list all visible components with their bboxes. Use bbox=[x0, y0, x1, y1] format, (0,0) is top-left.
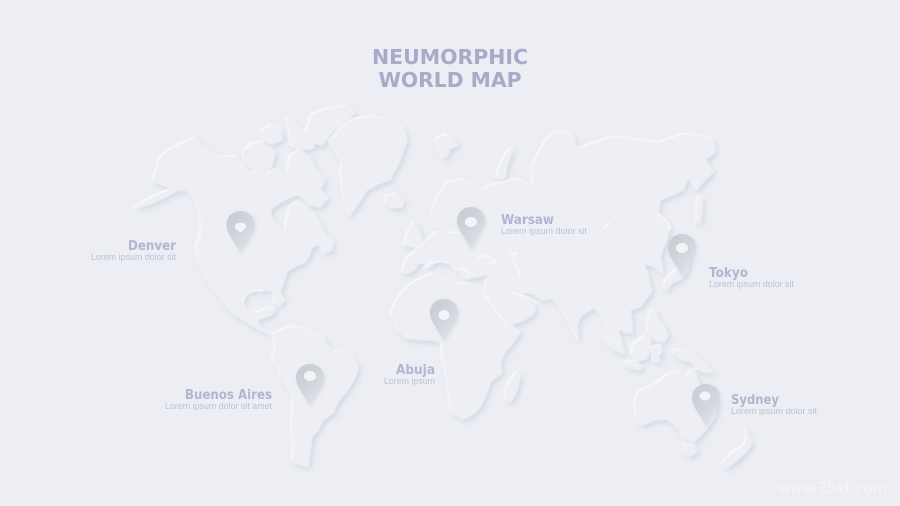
pin: Buenos Aires bbox=[296, 364, 324, 406]
island: Java bbox=[625, 362, 642, 370]
island: Borneo bbox=[632, 337, 651, 361]
label: Tokyo: Tokyo bbox=[709, 266, 748, 281]
island: Madagascar bbox=[506, 373, 520, 402]
island: Japan bbox=[664, 254, 690, 290]
continent: Australia bbox=[635, 371, 718, 442]
continent: Eurasia bbox=[403, 133, 715, 350]
continent: Africa bbox=[392, 274, 520, 419]
island: Sulawesi bbox=[652, 346, 662, 362]
label: Sydney: Sydney bbox=[731, 393, 779, 408]
label: Sydney bbox=[731, 393, 818, 416]
title: WORLD MAP bbox=[378, 68, 522, 92]
label: Abuja: Lorem ipsum bbox=[384, 376, 435, 386]
islands: Philippines bbox=[648, 311, 668, 342]
inland seas and coast highlights bbox=[243, 213, 671, 360]
label: Denver: Lorem ipsum dolor sit bbox=[91, 252, 177, 262]
island: New Guinea bbox=[673, 351, 713, 373]
label: Warsaw: Warsaw bbox=[501, 213, 554, 228]
islands: New Zealand bbox=[723, 430, 752, 468]
Arctic islands bbox=[243, 142, 275, 172]
label: Buenos Aires: Lorem ipsum dolor sit amet bbox=[165, 401, 273, 411]
label: Denver: Denver bbox=[128, 239, 177, 254]
island: Tasmania bbox=[685, 444, 697, 456]
pin: Tokyo bbox=[668, 234, 696, 276]
label: Abuja bbox=[384, 363, 435, 386]
island: Sakhalin bbox=[697, 198, 702, 223]
world map bbox=[135, 107, 752, 468]
label: Tokyo bbox=[709, 266, 795, 289]
island: Novaya Zemlya bbox=[497, 149, 513, 179]
label: Buenos Aires: Buenos Aires bbox=[185, 388, 272, 403]
label: Denver bbox=[91, 239, 177, 262]
continent: South America bbox=[273, 327, 358, 467]
title: NEUMORPHIC bbox=[372, 45, 528, 69]
label: Tokyo: Lorem ipsum dolor sit bbox=[709, 279, 795, 289]
title bbox=[372, 45, 528, 92]
label: Warsaw: Lorem ipsum dolor sit bbox=[501, 226, 588, 236]
label: Warsaw bbox=[501, 213, 588, 236]
pin: Warsaw bbox=[457, 207, 485, 249]
pin: Sydney bbox=[692, 384, 720, 426]
label: Abuja: Abuja bbox=[396, 363, 435, 378]
watermark: www.25xt.com bbox=[778, 479, 887, 497]
pin: Denver bbox=[226, 211, 254, 253]
island: Iceland bbox=[436, 135, 457, 158]
islands: Britain and Ireland bbox=[405, 223, 422, 247]
island: Sumatra bbox=[606, 337, 625, 354]
label: Buenos Aires bbox=[165, 388, 273, 411]
label: Sydney: Lorem ipsum dolor sit bbox=[731, 406, 818, 416]
continent: North America bbox=[135, 138, 328, 335]
pin: Abuja bbox=[430, 299, 458, 341]
island: Greenland bbox=[330, 117, 407, 215]
